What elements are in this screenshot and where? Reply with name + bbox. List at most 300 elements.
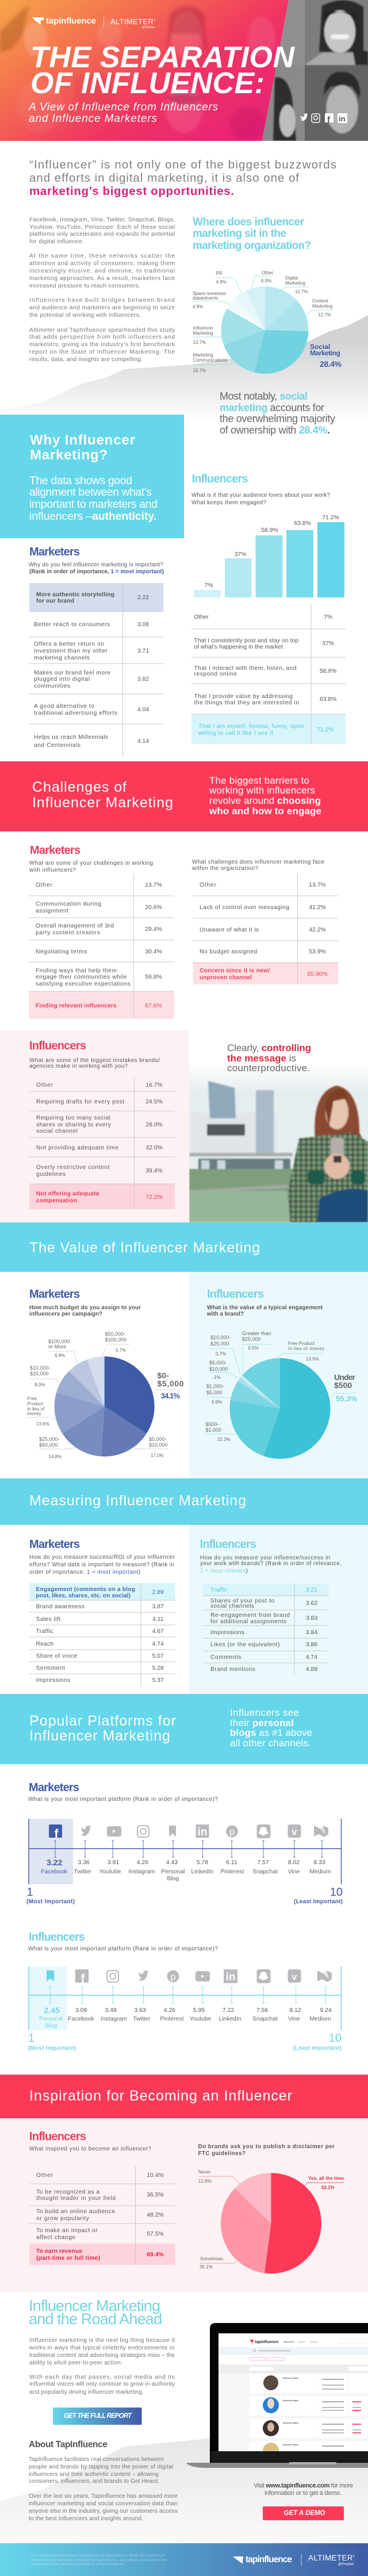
table: reasons ranking: communities	[34, 683, 70, 689]
intro body text: marketing approaches. As a result, marketers face	[29, 275, 175, 282]
marketers: measure success: 4.67	[152, 1628, 164, 1635]
table: audience reasons: 37%	[322, 641, 334, 647]
table: audience reasons: That I am myself, honest, funny, open,	[198, 723, 306, 730]
marketers: measure success: Engagement (comments on a blog	[36, 1586, 135, 1593]
pie labels: Spans numerous	[193, 291, 226, 296]
influencers: measure influence: 3.86	[306, 1642, 317, 1648]
FTC question	[198, 2144, 335, 2157]
intro body text: results, data, and insights are compelling.	[29, 356, 143, 363]
footer logos: ALTIMETER’	[308, 2554, 355, 2562]
values and labels: Blog	[167, 1876, 179, 1882]
table: reasons ranking: marketing channels	[34, 655, 90, 661]
road ahead text: works in ways that typical celebrity endorsements or	[29, 2345, 175, 2351]
table: reasons ranking: A good alternative to	[34, 703, 94, 710]
marketers: measure success	[29, 1538, 175, 1686]
intro body text: increasingly elusive, and immune, to traditional	[29, 268, 175, 274]
table: reasons ranking: Helps us reach Millennials	[34, 734, 108, 741]
platform icons: v	[292, 1827, 297, 1837]
about tapinfluence: people and brands by tapping into the power of digital	[29, 2464, 173, 2470]
values and labels: 3.49	[105, 2007, 117, 2014]
values and labels: 7.57	[257, 1860, 269, 1866]
influencers: platform ranking: Influencers	[29, 1931, 85, 1943]
marketers: challenges table: Other	[36, 882, 53, 888]
values and labels: 3.91	[108, 1860, 119, 1866]
laptop screen: tapinfluence	[255, 2340, 278, 2344]
table: reasons ranking: 4.04	[137, 707, 149, 713]
values and labels: 3.22	[47, 1858, 63, 1867]
engagement labels: $5,000	[206, 1390, 223, 1396]
table: reasons ranking: 3.71	[137, 648, 149, 654]
organization challenges table: 42.2%	[309, 927, 326, 933]
values and labels: Pinterest	[220, 1869, 244, 1875]
budget labels: Product	[28, 1401, 44, 1406]
footer	[0, 2543, 368, 2576]
callout: most notably: marketing accounts for	[220, 402, 324, 413]
panel: influencers mistakes: 72.2%	[145, 1194, 163, 1201]
bar chart: 63.8%	[294, 520, 311, 527]
intro body text: Influencers have built bridges between brand	[29, 297, 175, 304]
band: challenges: revolve around choosing	[209, 795, 321, 806]
FTC labels: Yes, all the time	[308, 2176, 344, 2181]
panel: influencers mistakes: agencies make in working with you?	[29, 1063, 128, 1070]
pie labels: 4.9%	[216, 279, 227, 285]
values and labels: 6.11	[226, 1860, 237, 1866]
band: inspiration	[0, 2075, 368, 2118]
intro body text: marketers, giving us the industry’s first benchmark	[29, 342, 175, 348]
table: audience reasons: 63.8%	[320, 696, 336, 703]
subtitle: and Influence Marketers	[29, 113, 158, 125]
callout: most notably: the overwhelming majority	[220, 413, 335, 424]
marketers: why important: (Rank in order of importance, 1 = most important)	[29, 569, 164, 575]
intro headline: “Influencer” is not only one of the biggest buzzwords	[29, 158, 336, 171]
marketers: challenges table: 59.8%	[145, 974, 162, 980]
organization challenges table: Concern since it is new/	[200, 968, 270, 974]
heading: where does influencer marketing sit: marketing organization?	[193, 240, 311, 252]
engagement labels: 1%	[214, 1375, 221, 1380]
title	[30, 41, 295, 100]
pie labels: 28.4%	[320, 359, 342, 369]
values and labels: Medium	[310, 1869, 331, 1875]
table: audience reasons: 58.9%	[320, 668, 336, 674]
panel: why influencer marketing: alignment between what’s	[29, 486, 152, 499]
scale ends: 1	[28, 2032, 34, 2045]
panel: influencers mistakes: Requiring too many social	[36, 1115, 110, 1121]
panel: influencers mistakes: 32.0%	[145, 1145, 163, 1151]
about tapinfluence: TapInfluence facilitates real conversations between	[29, 2456, 164, 2463]
values and labels: 5.78	[197, 1860, 208, 1866]
road ahead text: traditional content and advertising strategies miss – the	[29, 2352, 175, 2359]
about tapinfluence: influencer marketing and social conversation data than	[29, 2501, 178, 2507]
button: get the full report: GET THE FULL REPORT	[64, 2413, 132, 2420]
band: popular platforms: Popular Platforms for	[29, 1713, 176, 1729]
values and labels: 3.63	[135, 2007, 146, 2014]
panel: influencers mistakes: 16.7%	[145, 1082, 163, 1088]
influencers: measure influence: your work with brands? (Rank in order of relevance,	[200, 1561, 342, 1567]
marketers: measure success: 5.28	[152, 1665, 164, 1672]
marketers: challenges table: engage their communities while	[36, 974, 127, 980]
panel: influencers mistakes: compensation	[36, 1198, 77, 1204]
budget labels: $10,000-	[30, 1365, 51, 1371]
marketers: budget	[27, 1288, 184, 1459]
platform icons: in	[226, 1971, 235, 1983]
marketers: challenges table: 13.7%	[145, 882, 162, 888]
marketers: challenges table: Negotiating terms	[36, 949, 87, 955]
table: reasons ranking: for our brand	[36, 598, 74, 604]
panel: why influencer marketing: Why Influencer	[30, 432, 135, 448]
scale ends: (Most Important)	[28, 2045, 76, 2052]
pie labels: Communications	[193, 358, 228, 363]
table: reasons ranking: 2.22	[137, 595, 149, 601]
influencers: measure influence: Impressions	[210, 1630, 244, 1636]
marketers: measure success: 5.37	[152, 1677, 164, 1684]
table: reasons ranking: 3.82	[137, 676, 149, 683]
organization challenges table: 55.90%	[307, 971, 328, 977]
organization challenges table: Unaware of what it is	[200, 927, 259, 933]
influencers: engagement value: What is the value of a typical engagement	[207, 1305, 323, 1311]
values and labels: Twitter	[133, 2016, 151, 2022]
engagement labels: 22.3%	[217, 1437, 231, 1442]
budget labels: 13.6%	[36, 1421, 49, 1427]
intro body text: report on the State of Influencer Marketing. The	[29, 349, 175, 355]
axis scale	[29, 1819, 342, 1884]
engagement labels: 13.5%	[306, 1356, 319, 1362]
values and labels	[41, 1858, 331, 1882]
values and labels: 7.22	[223, 2007, 234, 2014]
laptop screen: Influencers	[283, 2341, 294, 2343]
pie labels: departments	[193, 296, 218, 301]
band: challenges: who and how to engage	[209, 806, 321, 816]
influencers: engagement value: with a brand?	[206, 1311, 244, 1317]
panel: why influencer marketing: Marketing?	[30, 447, 108, 463]
table: inspiration reasons	[29, 2166, 175, 2265]
intro body text: attention and activity of consumers, making them	[29, 260, 175, 267]
footer logos	[233, 2554, 355, 2566]
budget labels: $50,000	[39, 1442, 58, 1448]
values and labels: Instagram	[128, 1869, 155, 1875]
marketers: measure success: 4.74	[152, 1641, 164, 1647]
about tapinfluence: anyone else in the industry, giving our customers access	[29, 2508, 178, 2514]
about tapinfluence: Over the last six years, TapInfluence has amassed more	[29, 2493, 178, 2500]
callout: controlling the message: counterproductive.	[227, 1063, 310, 1074]
budget labels: 8.0%	[34, 1382, 45, 1387]
band: popular platforms: Influencer Marketing	[29, 1728, 170, 1744]
pie labels: Marketing	[310, 349, 340, 357]
budget labels: $100,000	[105, 1337, 126, 1343]
grey mountain background	[0, 315, 368, 423]
panel: inspiration	[0, 2118, 368, 2292]
scale ends	[26, 1886, 343, 1905]
marketers: budget: How much budget do you assign to your	[29, 1305, 141, 1311]
band: popular platforms: Influencers see	[230, 1707, 299, 1718]
road ahead text: Influencer marketing is the next big thing because it	[29, 2337, 175, 2344]
table: inspiration reasons: To be recognized as a	[36, 2189, 99, 2195]
engagement labels: $1,000-	[206, 1383, 224, 1389]
marketers: why important: Marketers	[29, 546, 80, 558]
budget labels: 5.7%	[116, 1348, 126, 1353]
influencers: measure influence: Traffic	[210, 1587, 228, 1593]
budget labels: 6.8%	[55, 1353, 65, 1358]
disclaimer	[31, 2554, 166, 2566]
budget labels: $5,000-	[149, 1436, 167, 1442]
marketers: why important: Why do you feel influencer marketing is important?	[29, 562, 164, 568]
band: popular platforms: blogs as #1 above	[230, 1727, 312, 1738]
scale ends: (Least Important)	[293, 2045, 342, 2052]
panel: influencers mistakes: Other	[36, 1082, 53, 1088]
values and labels: LinkedIn	[191, 1869, 214, 1875]
budget labels: $25,000-	[39, 1436, 60, 1442]
laptop screen: Influencer Name	[283, 2444, 298, 2446]
values and labels: LinkedIn	[218, 2016, 241, 2022]
visit text: information or to get a demo.	[264, 2490, 342, 2497]
values and labels: Facebook	[68, 2016, 95, 2022]
influencers: measure influence: Comments	[210, 1654, 241, 1661]
platform icons	[49, 1824, 328, 1841]
influencers: engagement value: Influencers	[207, 1288, 264, 1301]
road ahead text	[29, 2337, 175, 2395]
axis scale	[29, 1966, 342, 2030]
button: get the full report	[53, 2408, 141, 2425]
organization challenges table: 41.2%	[309, 904, 326, 911]
footer logos: @Prophet	[338, 2563, 354, 2566]
pie labels: 15.7%	[193, 368, 206, 373]
values and labels: 9.24	[320, 2007, 332, 2014]
table: audience reasons: willing to call it like I see it	[198, 730, 273, 737]
values and labels: 8.12	[289, 2007, 301, 2014]
engagement labels: 55.3%	[336, 1394, 357, 1403]
table: reasons ranking: Makes our brand feel more	[34, 670, 110, 676]
engagement labels: Free Product	[288, 1341, 315, 1346]
influencers: measure influence: 4.89	[306, 1666, 317, 1673]
pie labels: 12.7%	[295, 289, 308, 294]
table: audience reasons: That I consistently post and stay on top	[194, 638, 298, 644]
greyscale photos	[259, 0, 368, 141]
FTC labels	[198, 2169, 344, 2270]
intro body text: increased pressure to reach consumers.	[29, 283, 140, 289]
budget labels: money	[28, 1411, 41, 1416]
marketers: measure success: 2.89	[152, 1589, 164, 1596]
button: get a demo: GET A DEMO	[284, 2510, 325, 2517]
influencers: measure influence: 3.83	[306, 1615, 317, 1621]
panel: influencers mistakes: What are some of the biggest mistakes brands/	[29, 1057, 160, 1064]
FTC question: FTC guidelines?	[198, 2150, 246, 2157]
influencers: measure influence: 4.74	[306, 1654, 317, 1661]
callout: controlling the message: Clearly, controlling	[227, 1042, 311, 1053]
engagement labels: in lieu of money	[288, 1346, 324, 1351]
disclaimer: This custom research report is sponsored by TapInfluence. While the research in	[31, 2554, 164, 2558]
marketers: platform ranking: Marketers	[29, 1781, 79, 1794]
pie chart: FTC disclaimer	[198, 2169, 344, 2270]
pie labels: Marketing	[285, 281, 305, 286]
road ahead text: influential voices will only continue to grow in authority	[29, 2381, 175, 2387]
platform icons: p	[229, 1827, 235, 1837]
laptop screen: Influencer Name	[283, 2422, 298, 2424]
influencers: audience loves: What keeps them engaged?	[191, 500, 267, 506]
values and labels: 4.26	[137, 1860, 148, 1866]
influencers: platform ranking: What is your most important platform (Rank in order of importance)?	[28, 1946, 218, 1952]
platform icons: in	[198, 1826, 207, 1838]
table: reasons ranking: More authentic storytelling	[36, 592, 114, 598]
marketers: measure success: order of importance, 1 = most important)	[29, 1569, 140, 1575]
scale ends: 10	[329, 2032, 342, 2045]
photo: woman with phone	[189, 1064, 368, 1222]
visit text	[254, 2482, 353, 2497]
influencers: measure influence: 1 = most relevant)	[200, 1568, 248, 1574]
band: popular platforms: their personal	[230, 1718, 294, 1728]
marketers: measure success: 3.87	[152, 1604, 164, 1610]
platform icons: v	[292, 1972, 297, 1982]
band: popular platforms: all other channels.	[230, 1738, 311, 1749]
panel: influencers mistakes: 28.0%	[145, 1122, 163, 1128]
organization challenges table: unproven channel	[200, 975, 252, 981]
bar chart: 71.2%	[322, 515, 339, 521]
engagement labels: $25,000	[210, 1341, 229, 1347]
FTC labels: Sometimes	[200, 2256, 223, 2261]
marketers: challenges table: assignment	[36, 908, 68, 914]
laptop screen: Influencer Name	[283, 2377, 298, 2379]
pie labels: Marketing	[193, 331, 213, 336]
marketers: challenges table: 30.4%	[145, 949, 162, 955]
budget labels: Free	[28, 1396, 37, 1401]
budget labels: or More	[48, 1344, 66, 1350]
table: audience reasons: the things that they are interested in	[194, 700, 299, 706]
values and labels: Personal	[161, 1869, 185, 1875]
values and labels: Medium	[310, 2016, 331, 2022]
values and labels: Snapchat	[252, 1869, 278, 1875]
marketers: challenges table	[29, 844, 174, 1019]
band: challenges: The biggest barriers to	[209, 775, 309, 786]
table: audience reasons: of what’s happening in the market	[194, 644, 283, 650]
table: inspiration reasons: affect change	[36, 2234, 75, 2241]
bar chart: 7%	[204, 582, 213, 589]
pie labels: 13.7%	[193, 340, 206, 345]
budget labels	[27, 1331, 184, 1459]
laptop screen	[218, 2333, 368, 2459]
influencers: measure influence: Influencers	[200, 1538, 256, 1551]
engagement labels: 6.6%	[212, 1400, 222, 1405]
panel: inspiration: What inspired you to become an influencer?	[29, 2146, 152, 2152]
engagement labels: $5,000-	[209, 1360, 227, 1366]
table: reasons ranking: 3.08	[137, 622, 149, 628]
highlight: personal blog	[29, 1966, 67, 2030]
bar chart	[194, 515, 344, 597]
scale ends: 10	[330, 1886, 343, 1899]
budget labels: $50,000-	[105, 1331, 125, 1337]
intro body text: platforms only accelerates and expands the potential	[29, 231, 175, 237]
engagement labels: $25,000	[242, 1336, 261, 1342]
organization challenges table: within the organization?	[191, 865, 259, 872]
light panels right column	[189, 1272, 368, 1478]
table: audience reasons: That I interact with them, listen, and	[194, 665, 297, 672]
pie labels: 12.7%	[318, 312, 331, 317]
panel: influencers mistakes: Overly restrictive content	[36, 1164, 110, 1171]
highlight: Facebook	[29, 1819, 73, 1884]
about tapinfluence	[29, 2440, 178, 2522]
marketers: measure success: Brand awareness	[36, 1604, 85, 1610]
panel: influencers mistakes: Influencers	[29, 1040, 86, 1052]
engagement labels: $10,000-	[210, 1335, 231, 1340]
hero banner	[0, 0, 368, 141]
influencers: measure influence: 3.84	[306, 1630, 317, 1636]
pie labels	[193, 270, 343, 373]
logo: Altimeter: @Prophet	[141, 26, 155, 29]
influencers: measure influence: social channels	[210, 1603, 254, 1609]
table: inspiration reasons: thought leader in your field	[36, 2195, 116, 2202]
laptop base	[187, 2463, 368, 2468]
influencers: audience loves	[191, 473, 346, 744]
marketers: measure success: Sales lift	[36, 1616, 60, 1623]
values and labels: 3.09	[75, 2007, 87, 2014]
table: inspiration reasons: 10.4%	[147, 2172, 164, 2179]
influencers: measure influence: Brand mentions	[210, 1666, 255, 1673]
panel: why influencer marketing: The data shows good	[29, 474, 132, 487]
marketers: challenges table: 67.6%	[145, 1003, 162, 1009]
road ahead text: ability to elicit peer-to-peer action.	[29, 2360, 122, 2366]
engagement labels: 0.7%	[216, 1351, 226, 1356]
logo: Altimeter	[103, 16, 155, 29]
band: measuring: Measuring Influencer Marketing	[29, 1493, 246, 1509]
marketers: challenges table: with influencers?	[29, 867, 76, 873]
pie labels: 4.9%	[193, 304, 203, 309]
values and labels: Youtube	[190, 2016, 212, 2022]
engagement labels: Greater than	[242, 1331, 271, 1336]
marketers: challenges table: Finding relevant influencers	[36, 1003, 117, 1009]
table: audience reasons: Other	[194, 614, 209, 620]
table: inspiration reasons: or grow popularity	[36, 2215, 90, 2222]
organization challenges table: 53.9%	[309, 949, 326, 955]
intro body text: YouNow, YouTube, Periscope: Each of these social	[29, 224, 175, 231]
pie labels: Marketing	[312, 304, 332, 309]
social icons: in	[339, 114, 346, 123]
influencers: audience loves: What is it that your audience loves about your work?	[191, 492, 331, 499]
about tapinfluence: influencers and their authentic content – allowing	[29, 2471, 159, 2478]
about tapinfluence: consumers, influencers, and brands to Get Heard.	[29, 2478, 159, 2485]
callout: most notably: of ownership with 28.4%.	[220, 424, 330, 436]
table: audience reasons: 71.2%	[317, 727, 334, 733]
social icons	[300, 113, 347, 125]
marketers: measure success: Share of voice	[36, 1653, 77, 1659]
panel: influencers mistakes: social channel	[36, 1128, 78, 1134]
marketers: measure success: Sentiment	[36, 1665, 65, 1672]
panel: why influencer marketing	[0, 415, 184, 538]
engagement labels: Under	[334, 1373, 356, 1382]
FTC question: Do brands ask you to publish a disclaimer per	[198, 2144, 335, 2150]
influencers: audience loves: Influencers	[192, 473, 248, 485]
logo: Altimeter: ALTIMETER’	[110, 17, 155, 26]
engagement labels: 0.5%	[248, 1346, 259, 1351]
pie chart: engagement value	[205, 1331, 357, 1442]
table: inspiration reasons: 57.5%	[147, 2231, 164, 2237]
panel: influencers mistakes: shares or sharing to every	[36, 1122, 112, 1128]
table: reasons ranking: plugged into digital	[34, 676, 90, 683]
values and labels: 4.43	[166, 1860, 178, 1866]
panel: influencers mistakes: 39.4%	[145, 1168, 163, 1174]
band: inspiration: Inspiration for Becoming an Influencer	[29, 2088, 292, 2104]
bar chart: 37%	[235, 551, 246, 558]
influencers: measure influence	[200, 1538, 342, 1675]
engagement labels: $500-	[206, 1421, 219, 1427]
grey mountain background bottom	[0, 2415, 368, 2543]
intro body text: Altimeter and TapInfluence spearheaded this study	[29, 327, 175, 334]
intro body text: the potential of working with influencers.	[29, 312, 141, 319]
title: OF INFLUENCE:	[30, 67, 264, 100]
about tapinfluence: to the best influencers and insights around.	[29, 2516, 143, 2522]
budget labels: $10,000	[149, 1442, 168, 1448]
marketers: measure success: efforts? What data is important to measure? (Rank in	[29, 1562, 174, 1568]
marketers: challenges table: 29.4%	[145, 926, 162, 933]
road ahead text: With each day that passes, social media and its	[29, 2374, 175, 2380]
values and labels: Personal	[39, 2016, 63, 2022]
table: inspiration reasons: To build an online audience	[36, 2209, 115, 2215]
